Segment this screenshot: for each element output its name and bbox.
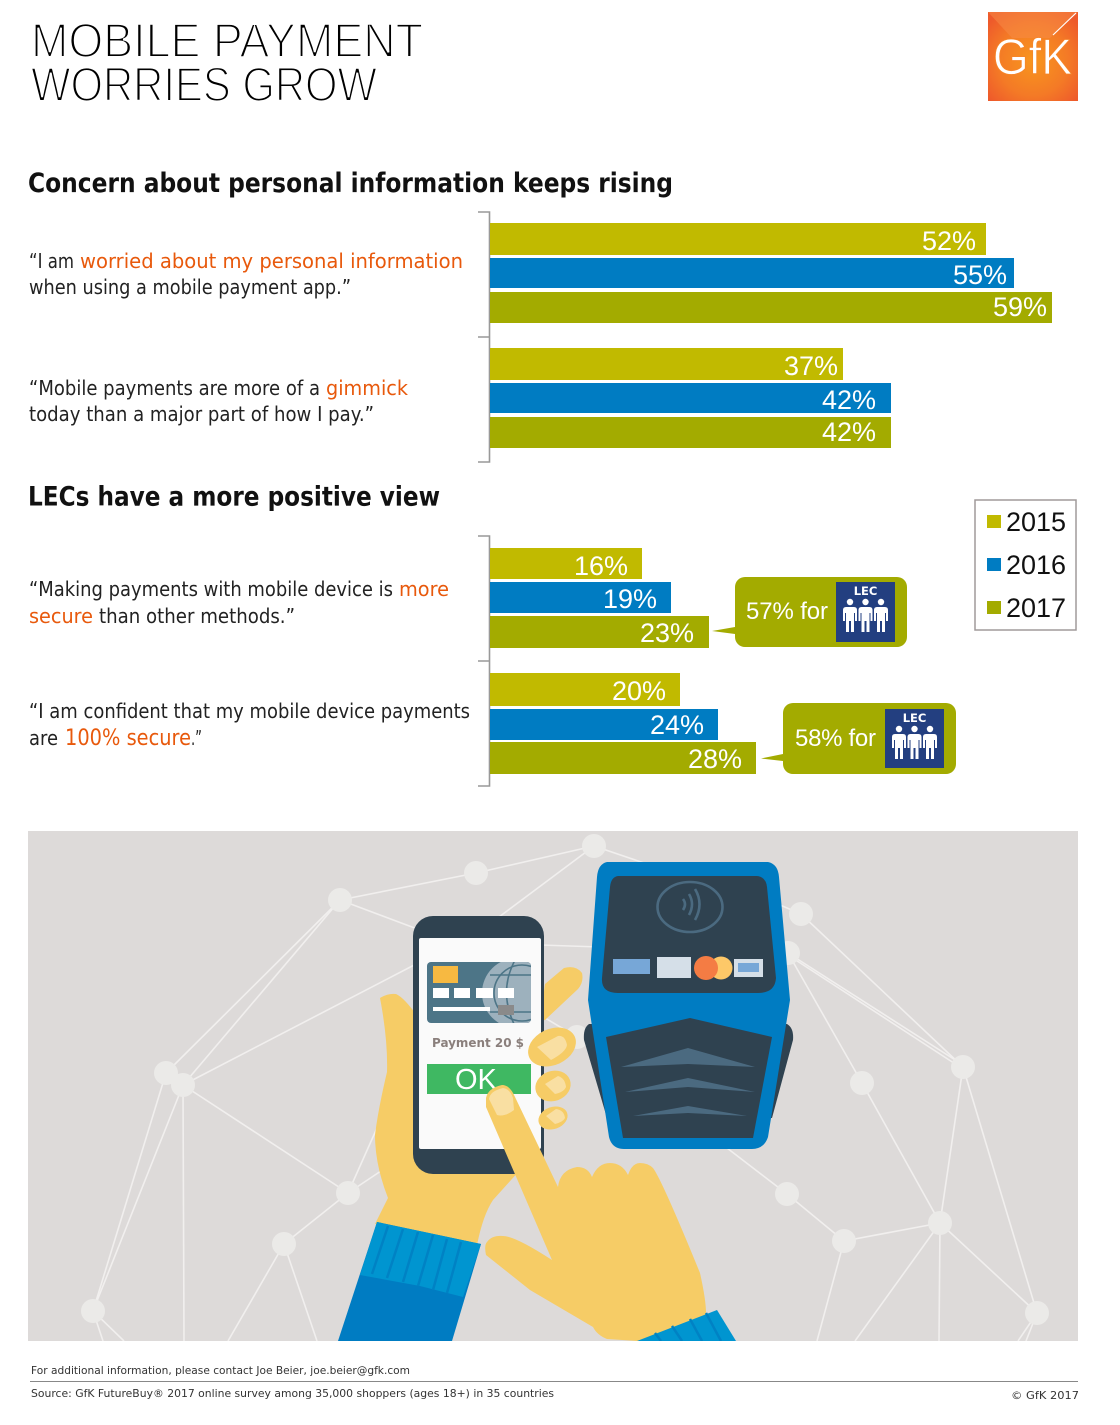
- bar chart: LEC: 16%: [574, 551, 628, 581]
- quote: more secure: “Making payments with mobile device is: [29, 577, 393, 601]
- legend: [975, 500, 1076, 630]
- footer: Source: GfK FutureBuy® 2017 online survey among 35,000 shoppers (ages 18+) in 35 countries: [31, 1387, 554, 1400]
- bar chart: concern: 42%: [822, 385, 876, 415]
- bar chart: concern: 52%: [922, 226, 976, 256]
- legend: 2017: [1006, 593, 1066, 623]
- bar chart: LEC: 24%: [650, 710, 704, 740]
- bar chart: concern: 59%: [993, 292, 1047, 322]
- legend: 2015: [1006, 507, 1066, 537]
- callout: 58% for LEC: LEC: [903, 711, 926, 725]
- quote: worried about personal information: “I am: [29, 249, 74, 273]
- bar chart: concern: [478, 212, 1052, 462]
- quote: more secure: secure: [29, 604, 93, 628]
- quote: 100% secure: 100% secure: [65, 726, 191, 751]
- callout: 57% for LEC: LEC: [854, 584, 877, 598]
- left hand and phone: Payment 20 $: [432, 1035, 524, 1050]
- left hand and phone: OK: [455, 1064, 498, 1096]
- footer: © GfK 2017: [1011, 1389, 1079, 1402]
- bar chart: LEC: 19%: [603, 584, 657, 614]
- quote: worried about personal information: worried about my personal information: [80, 249, 463, 273]
- callout: 58% for LEC: [761, 703, 956, 774]
- right hand: [485, 1085, 736, 1341]
- quote: gimmick: “Mobile payments are more of a: [29, 376, 320, 400]
- callout: 57% for LEC: [712, 577, 907, 647]
- quote: 100% secure: “I am confident that my mobile device payments: [29, 699, 470, 723]
- bar chart: LEC: [478, 536, 756, 786]
- bar chart: LEC: 23%: [640, 618, 694, 648]
- quote: gimmick: [29, 376, 408, 426]
- title: MOBILE PAYMENT: [31, 15, 423, 68]
- payment terminal: [584, 862, 793, 1149]
- logo: GfK: GfK: [993, 29, 1072, 85]
- footer: [30, 1364, 1079, 1402]
- heading: concern: Concern about personal information keeps rising: [28, 168, 673, 199]
- panel: illustration: [28, 831, 1078, 1341]
- bar chart: concern: 55%: [953, 260, 1007, 290]
- heading: LECs: LECs have a more positive view: [28, 482, 440, 512]
- quote: gimmick: today than a major part of how I pay.”: [29, 402, 374, 426]
- callout: 57% for LEC: 57% for: [746, 598, 828, 625]
- footer: For additional information, please contact Joe Beier, joe.beier@gfk.com: [31, 1364, 410, 1377]
- quote: worried about personal information: when using a mobile payment app.”: [29, 275, 351, 299]
- network background: [81, 834, 1049, 1341]
- quote: 100% secure: [29, 699, 470, 751]
- quote: gimmick: gimmick: [326, 376, 408, 400]
- left hand and phone: [375, 916, 582, 1245]
- quote: worried about personal information: [29, 249, 463, 299]
- quote: 100% secure: .”: [191, 726, 202, 750]
- bar chart: LEC: 20%: [612, 676, 666, 706]
- logo: GfK: [988, 12, 1078, 101]
- quote: more secure: than other methods.”: [99, 604, 295, 628]
- bar chart: concern: 42%: [822, 417, 876, 447]
- quote: 100% secure: are: [29, 726, 58, 750]
- left sleeve: [338, 1222, 481, 1341]
- bar chart: LEC: 28%: [688, 744, 742, 774]
- callout: 58% for LEC: 58% for: [795, 725, 876, 752]
- quote: more secure: more: [399, 577, 449, 601]
- title: WORRIES GROW: [31, 59, 378, 112]
- bar chart: concern: 37%: [784, 351, 838, 381]
- quote: more secure: [29, 577, 449, 628]
- legend: 2016: [1006, 550, 1066, 580]
- title: [31, 15, 423, 112]
